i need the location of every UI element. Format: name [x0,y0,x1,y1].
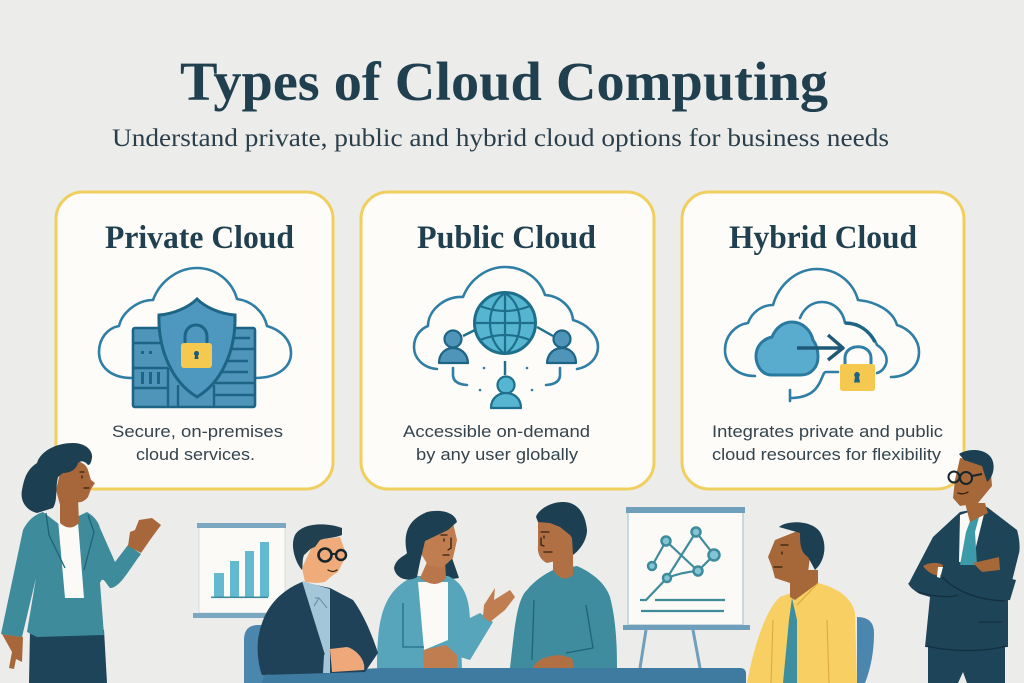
person: standing man with crossed arms [908,450,1020,683]
description: public cloud: Accessible on-demand [403,422,590,441]
description: private cloud: cloud services. [136,445,255,464]
panel: hybrid cloud [682,192,964,489]
heading: public cloud: Public Cloud [417,220,596,256]
bar chart board [193,523,286,618]
description: private cloud: Secure, on-premises [112,422,283,441]
person: standing presenter [1,443,161,683]
line chart board on easel [623,507,750,668]
icon: hybrid clouds with lock [725,269,919,401]
description: hybrid cloud: Integrates private and public [712,422,944,441]
person: seated woman [377,511,515,668]
chair right [857,617,874,683]
chair left [244,625,266,683]
description: public cloud: by any user globally [416,445,579,464]
description: hybrid cloud [712,422,944,464]
description: private cloud [112,422,283,464]
person: man in yellow shirt [747,522,857,683]
panel: public cloud [361,192,654,489]
person: seated man in glasses [258,524,378,675]
subtitle: Understand private, public and hybrid cloud options for business needs [112,125,889,152]
icon: cloud with server and shield [99,268,291,407]
heading: private cloud: Private Cloud [105,220,294,256]
description: hybrid cloud: cloud resources for flexibility [712,445,942,464]
description: public cloud [403,422,590,464]
panel: private cloud [56,192,333,489]
title: Types of Cloud Computing [180,51,828,112]
icon: cloud with globe and users [414,267,598,408]
person: seated man in teal sweater [510,502,617,668]
heading: hybrid cloud: Hybrid Cloud [729,220,917,256]
conference table [262,668,746,683]
